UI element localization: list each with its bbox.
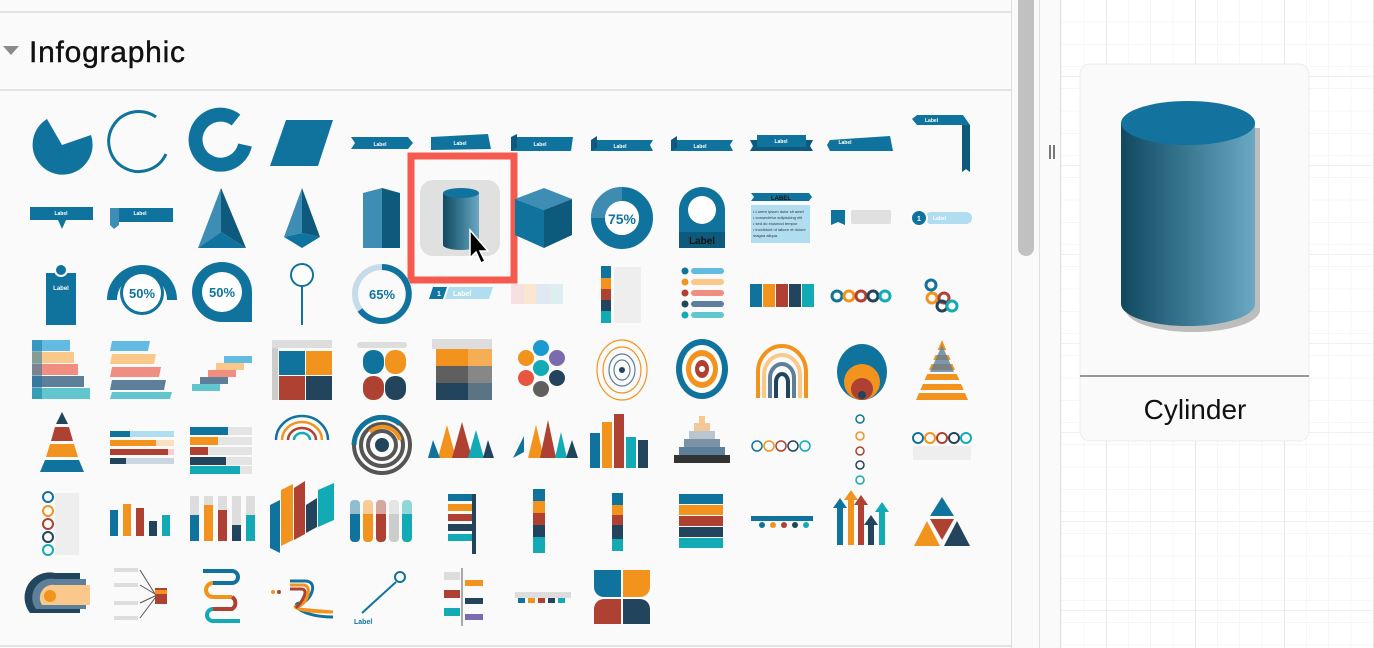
- icon: spiral rings: [354, 417, 410, 473]
- icon: banner 4: [591, 136, 653, 151]
- row 4 icons: [32, 339, 968, 400]
- icon: four petals: [594, 570, 650, 624]
- icon: banner 7: Label: [838, 140, 852, 146]
- icon: banner 6: [750, 135, 813, 151]
- icon: label text box: • sed do eiusmod tempor: [753, 221, 798, 226]
- icon: 50% half donut: [112, 270, 172, 315]
- icon: label with fold: Label: [133, 211, 147, 217]
- icon: banner 1: [351, 137, 413, 149]
- icon: corner ribbon: [912, 115, 970, 172]
- icon: label text box: • consectetur adipisicing elit: [753, 215, 803, 220]
- icon: banner 7: [827, 136, 893, 151]
- icon: segmented column: [533, 489, 545, 553]
- row 7 icons: [25, 568, 650, 626]
- icon: 65% ring: 65%: [369, 287, 395, 302]
- icon: 3d bars: [270, 481, 334, 553]
- canvas grid background: [1061, 0, 1374, 648]
- icon: vertical circles: [856, 415, 864, 484]
- icon: thick C: [196, 115, 245, 165]
- icon: tag with hole: [679, 187, 725, 248]
- icon: pyramid: [198, 188, 246, 248]
- icon: parallelogram: [270, 120, 333, 166]
- icon: s-curve: [203, 571, 240, 621]
- row 2 icons: [30, 156, 972, 280]
- icon: 2x2 text grid: [272, 340, 332, 400]
- icon: circle columns: [913, 433, 971, 460]
- icon: arrow bars: [590, 414, 648, 468]
- icon: label text box: [751, 193, 812, 243]
- icon: layered spiral: [25, 572, 90, 613]
- icon: 3x3 table: [432, 339, 492, 400]
- icon: banner 2: Label: [453, 141, 467, 147]
- icon: number banner: 1: [437, 291, 441, 298]
- icon: glass bars: [350, 500, 412, 542]
- icon: triangle peaks: [428, 422, 494, 458]
- row 1 icons: [33, 112, 970, 175]
- icon: arrows up: [833, 490, 889, 545]
- icon: segmented column 2: [612, 493, 623, 551]
- icon: arc gauges: [276, 416, 328, 440]
- icon: pastel table: [511, 284, 563, 304]
- icon: 50% half donut: 50%: [129, 286, 155, 301]
- icon: banner 3: [511, 134, 573, 151]
- highlight box: selected cylinder: [411, 156, 514, 280]
- row 3 icons: [46, 262, 957, 325]
- icon: tag with hole: Label: [689, 236, 715, 247]
- icon: cluster circles: [926, 280, 957, 311]
- icon: pie: [33, 119, 93, 175]
- icon: bookmark + box: [831, 210, 891, 225]
- icon: pin: [291, 264, 313, 325]
- icon: tall tag: Label: [53, 286, 69, 292]
- card label: Cylinder: [1144, 394, 1246, 425]
- icon: numbered bar: [911, 210, 972, 226]
- icon: layered pyramid: [916, 340, 968, 400]
- scrollbar thumb: [1018, 0, 1034, 256]
- icon: ribbon list: [448, 494, 476, 554]
- icon: banner 1: Label: [373, 142, 387, 148]
- section header: Infographic: Infographic: [29, 36, 185, 69]
- icon: timeline dots: [751, 516, 813, 528]
- icon: rounded 2x2 grid: [357, 342, 407, 400]
- icon: cursor: [470, 230, 488, 263]
- icon: mind map: [114, 568, 167, 620]
- icon: vertical list: [601, 266, 641, 323]
- icon: 65% ring: [355, 267, 409, 321]
- icon: thin arc: [109, 112, 166, 172]
- icon: concentric rings: [597, 340, 647, 400]
- icon: stacked label arrows: [32, 340, 90, 399]
- icon: 75% donut: 75%: [608, 211, 637, 227]
- icon: 75% donut: [598, 194, 646, 242]
- icon: progress bars: [110, 431, 174, 464]
- icon: 3d peaks: [513, 420, 578, 458]
- icon: colored tabs: [750, 284, 814, 307]
- icon: label text box: LABEL: [771, 196, 791, 202]
- icon: rainbow arches: [758, 346, 806, 398]
- icon: 50% donut: 50%: [209, 285, 235, 300]
- icon: cylinder bars: [110, 504, 170, 536]
- icon: tube bars: [190, 496, 255, 541]
- cylinder shape with shadow: [1121, 101, 1260, 332]
- icon: pin line: [354, 572, 405, 626]
- icon: slim pyramid: [284, 188, 320, 248]
- preview card: Cylinder: [1080, 64, 1309, 441]
- row 6 icons: [43, 481, 970, 555]
- icon: process steps: [515, 592, 571, 603]
- icon: cube: [515, 188, 572, 248]
- icon: tall tag: [46, 264, 76, 325]
- icon: label text box: magna aliqua.: [753, 233, 778, 238]
- icon: hexagon cluster: [518, 340, 565, 397]
- row 5 icons: [40, 412, 971, 484]
- icon: percentage bars: [190, 427, 252, 474]
- icon: 50% donut: [192, 262, 252, 322]
- icon: target: [676, 339, 728, 399]
- splitter handle: [1049, 145, 1055, 159]
- icon: circle list: [43, 492, 79, 555]
- icon: callout label: [30, 207, 93, 229]
- icon: banner 2: [431, 134, 491, 150]
- icon: banner 5: Label: [693, 144, 707, 150]
- icon: staircase labels: [192, 356, 252, 391]
- icon: tier pyramid: [40, 412, 84, 472]
- icon: stepped pyramid: [674, 416, 730, 463]
- icon: nested circles: [837, 344, 887, 400]
- icon: banner 4: Label: [613, 144, 627, 150]
- icon: numbered bar: Label: [933, 216, 947, 222]
- icon: label with fold: [110, 208, 173, 229]
- icon: banner 6: Label: [774, 139, 788, 145]
- icon: corner ribbon: Label: [925, 118, 939, 124]
- icon: banner 5: [671, 136, 733, 151]
- icon: banner 3: Label: [533, 142, 547, 148]
- icon: callout label: Label: [54, 211, 68, 217]
- icon: road: [271, 581, 333, 617]
- icon: slanted labels: [110, 341, 172, 399]
- icon: label text box: • Lorem ipsum dolor sit amet: [753, 209, 805, 214]
- icon: vertical timeline: [444, 568, 483, 626]
- icon: numbered list: [682, 268, 724, 318]
- icon: triangle mosaic: [914, 497, 970, 546]
- icon: prism: [363, 188, 400, 248]
- icon: circle row: [752, 441, 810, 451]
- icon: wave circles: [832, 291, 890, 301]
- icon: arrow list: [679, 494, 723, 548]
- icon: numbered bar: 1: [917, 216, 921, 223]
- icon: number banner: Label: [453, 291, 471, 298]
- icon: number banner: [429, 287, 493, 299]
- icon: label text box: • incididunt ut labore et dolore: [753, 227, 807, 232]
- icon: pin line: Label: [354, 619, 372, 626]
